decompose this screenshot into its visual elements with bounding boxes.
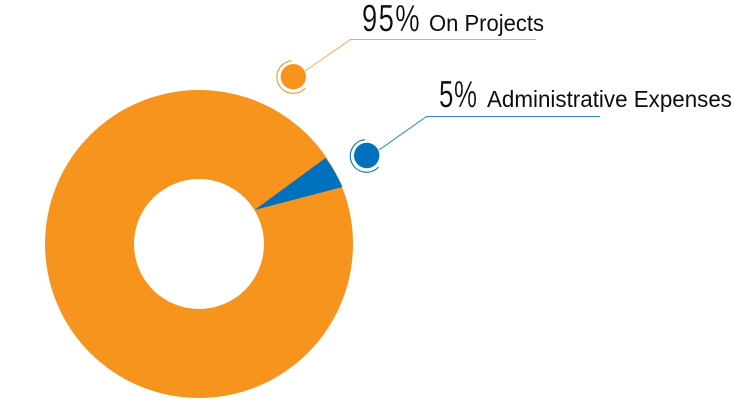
- label: 5% administrative expenses: 5%: [439, 73, 478, 115]
- segment: administrative expenses 5%: [254, 158, 342, 210]
- label: 95% on projects: [362, 0, 544, 40]
- icon: orange marker dot: [277, 61, 306, 93]
- segment: on projects 95%: [45, 90, 353, 398]
- label: 5% administrative expenses: [439, 73, 732, 115]
- label: 95% on projects: On Projects: [429, 10, 544, 36]
- label: 5% administrative expenses: Administrative Expenses: [487, 86, 732, 112]
- leader line: orange: [305, 40, 536, 71]
- leader line: blue: [379, 116, 600, 150]
- icon: blue marker dot: [350, 140, 379, 172]
- callout: 5% administrative expenses: [350, 73, 732, 172]
- callout: 95% on projects: [277, 0, 544, 93]
- donut chart: [45, 90, 353, 398]
